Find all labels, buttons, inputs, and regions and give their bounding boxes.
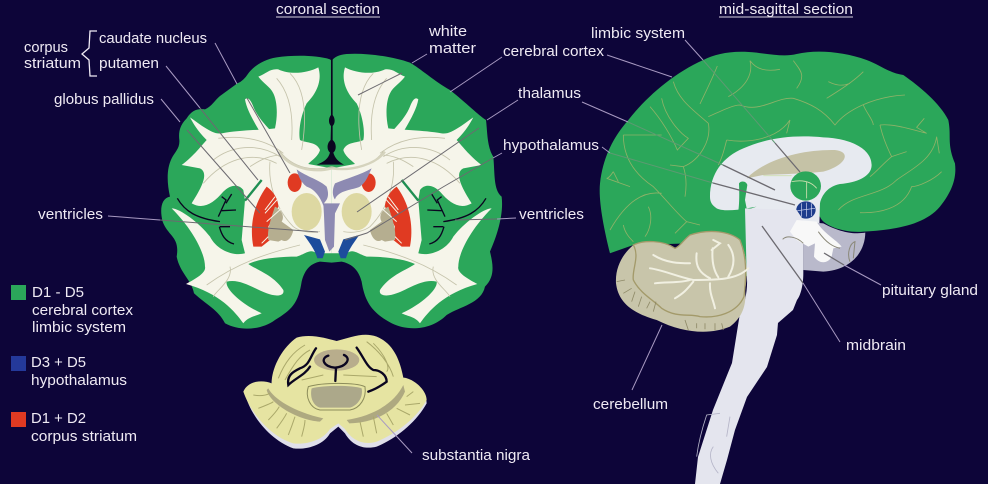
pituitary grey lines [783,232,855,262]
left hemisphere details [172,67,332,323]
coronal leader lines [108,43,518,240]
label: thalamus: thalamus [518,86,581,102]
legend: D3 + D5 [11,355,127,389]
thalamus in beige [292,193,322,230]
label: white matter: white [428,24,467,40]
label: corpus striatum with bracket: caudate nucleus [99,31,207,47]
grey fibre lines [203,73,332,297]
label: white matter [428,24,476,57]
fornix in beige [747,150,845,178]
cerebellum inner outline [633,231,746,317]
ventricle in black [177,194,236,244]
legend: D1 + D2: D1 + D2 [31,411,86,427]
inner leader lines [160,73,497,240]
legend: D1 + D2 [11,411,137,445]
legend: D1 - D5: limbic system [32,320,126,336]
label: corpus striatum with bracket: putamen [99,56,159,72]
label: corpus striatum with bracket: striatum [24,56,81,72]
hypothalamus in blue [796,201,816,219]
label: midbrain: midbrain [846,338,906,354]
slice body in yellow [243,335,427,444]
caudate nucleus in red [288,173,302,192]
legend: D1 - D5: cerebral cortex [32,303,134,319]
label: limbic system: limbic system [591,26,685,42]
label: white matter: matter [429,41,476,57]
cortical sulci [607,61,942,242]
dark leader lines over white matter [713,143,844,283]
outer leader lines [582,40,881,390]
outer leader lines [108,43,518,220]
sagittal leader lines [582,40,881,390]
legend: D1 - D5: D1 - D5 [32,285,84,301]
label: ventricles right: ventricles [519,207,584,223]
label: substantia nigra: substantia nigra [422,448,531,464]
label: globus pallidus: globus pallidus [54,92,154,108]
label: pituitary gland: pituitary gland [882,283,978,299]
heading: coronal section: coronal section [276,2,380,18]
heading: mid-sagittal section: mid-sagittal section [719,2,853,18]
right hemisphere mirrored [332,67,492,323]
legend: D1 + D2: corpus striatum [31,429,137,445]
mid-sagittal section brain [600,52,955,484]
aqueduct and black channels [288,348,387,392]
tegmentum outline [307,383,365,410]
label: hypothalamus: hypothalamus [503,138,599,154]
cerebellum in beige [616,231,747,332]
limbic green nucleus [790,171,821,201]
cerebrum in green [600,52,955,277]
cerebellum folia strokes [617,280,723,330]
pituitary in white [790,220,842,262]
white matter [172,67,332,323]
midbrain slice [243,335,427,449]
legend: D3 + D5: D3 + D5 [31,355,86,371]
olive fold lines [253,342,420,437]
legend: D1 - D5 [11,285,134,336]
hypothalamus details [797,203,815,217]
green finger stalk [732,182,757,270]
hypothalamus in blue [304,235,325,258]
cerebellum white branches [650,240,748,308]
label: cerebral cortex: cerebral cortex [503,44,605,60]
legend: D3 + D5: hypothalamus [31,373,127,389]
claustrum in dark green [245,180,262,201]
putamen in red [252,187,278,247]
globus pallidus [268,207,293,242]
label: corpus striatum with bracket [24,31,207,76]
pons in grey [803,222,865,272]
third ventricle grey-lilac structure [297,168,372,252]
olive cerebral peduncles [267,385,405,423]
slice drop shadow [245,337,427,449]
tectum cap [314,349,359,371]
label: ventricles left: ventricles [38,207,103,223]
substantia nigra leader line [377,415,412,453]
brainstem in pale lilac [695,208,803,484]
white finger in cortex [245,98,272,135]
cortex outline in green [161,54,502,329]
faint leader lines over cortex [610,60,775,183]
corpus callosum in white [710,136,872,227]
corpus callosum arc [278,152,385,170]
spinal cord grey scribbles [697,413,730,473]
coronal section brain [161,54,502,329]
nucleus inner lines [763,176,817,198]
central fissure in black [317,58,344,165]
central tegmentum in grey-olive [311,386,362,408]
label: cerebellum: cerebellum [593,397,668,413]
striatal white stripes [262,197,282,243]
label: corpus striatum with bracket: corpus [24,40,68,56]
